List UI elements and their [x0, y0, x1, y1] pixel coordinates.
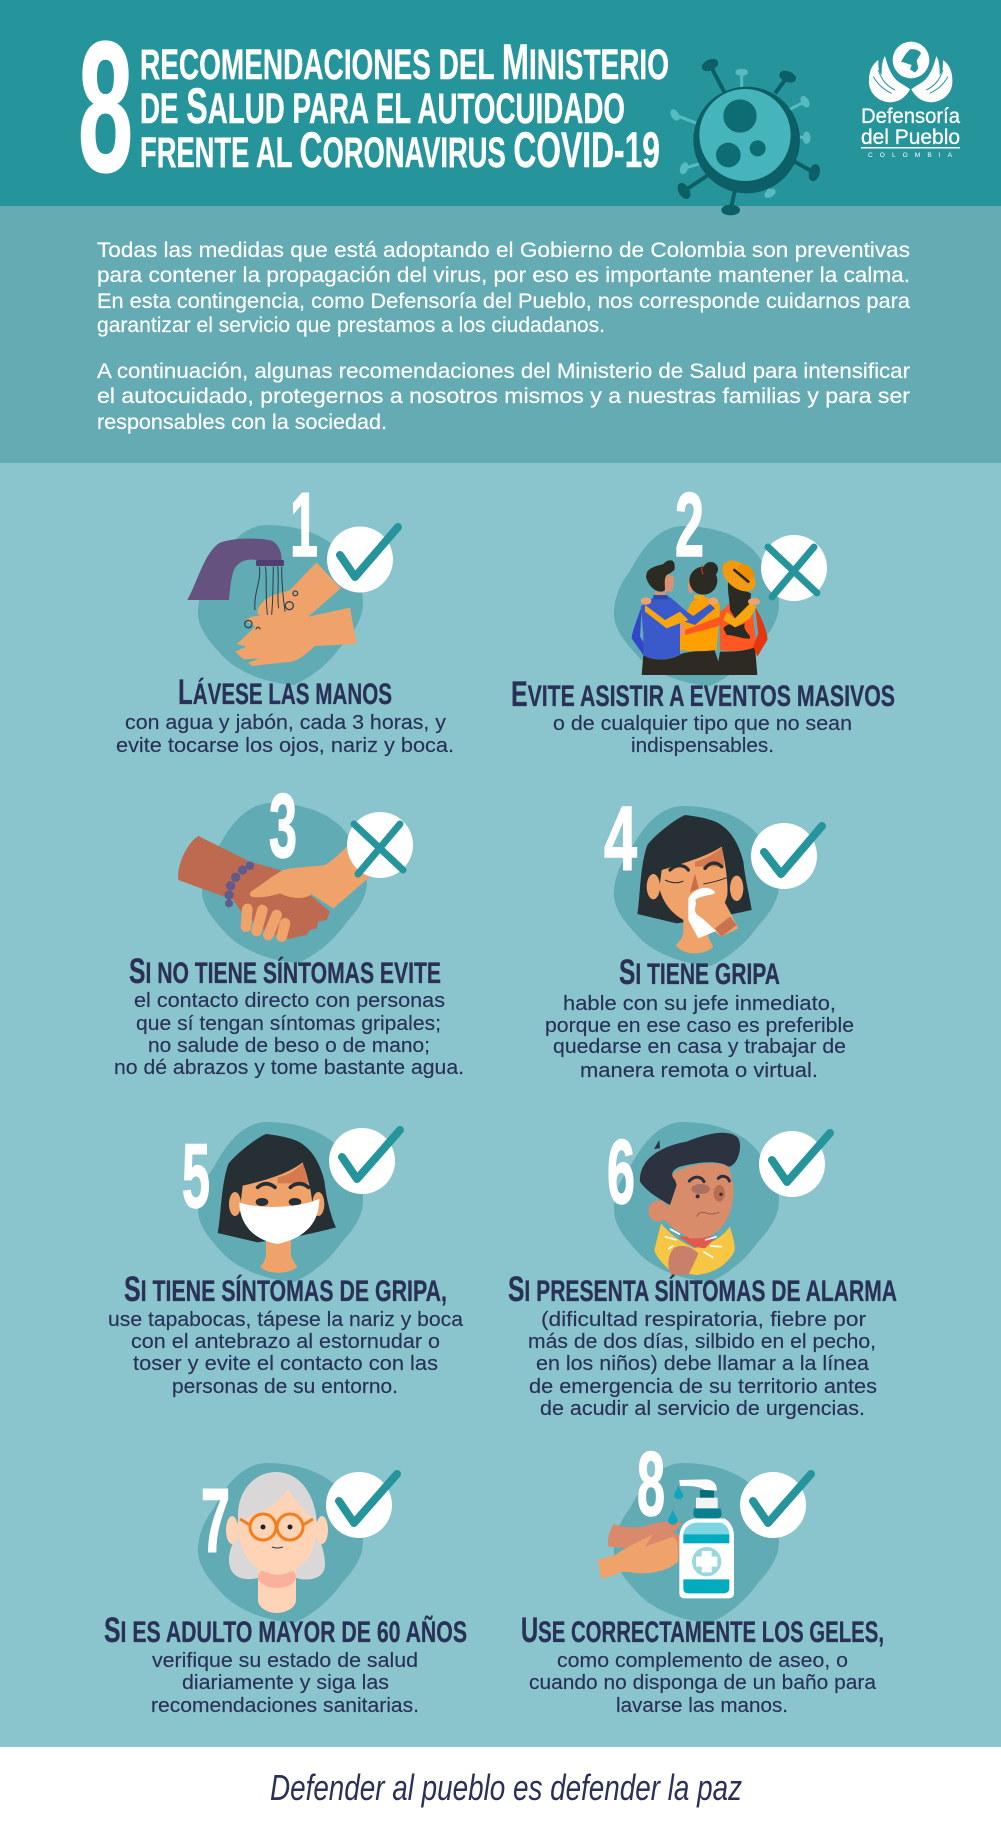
description 4: manera remota o virtual. — [580, 1059, 818, 1082]
logo: Defensoría del Pueblo — [861, 42, 960, 159]
description 5 — [108, 1308, 464, 1398]
intro paragraph 1: para contener la propagación del virus, por eso es importante mantener la calma. — [97, 263, 910, 287]
title — [140, 34, 669, 178]
illustration: handshake — [178, 836, 370, 939]
recommendation 5 — [108, 1122, 464, 1398]
description 5: con el antebrazo al estornudar o — [131, 1330, 440, 1353]
description 4: porque en ese caso es preferible — [545, 1014, 854, 1037]
blob 1 — [198, 525, 363, 685]
intro paragraph 2: el autocuidado, protegernos a nosotros mismos y a nuestras familias y para ser — [97, 384, 910, 408]
description 6: en los niños) debe llamar a la línea — [536, 1352, 870, 1375]
big number 8: 8 — [78, 4, 133, 211]
illustration: hand sanitizer — [597, 1479, 734, 1598]
check icon — [751, 823, 822, 889]
recommendation 8 — [521, 1434, 884, 1717]
main panel — [0, 463, 1001, 1747]
logo: Defensoría del Pueblo: del Pueblo — [861, 126, 960, 149]
heading 4: SI TIENE GRIPA — [619, 953, 780, 992]
illustration: woman with mask — [218, 1134, 336, 1273]
cross icon — [347, 812, 413, 878]
description 6: de acudir al servicio de urgencias. — [540, 1397, 865, 1420]
blob 6 — [614, 1122, 779, 1282]
heading 3: SI NO TIENE SÍNTOMAS EVITE — [129, 952, 441, 991]
description 4 — [545, 992, 854, 1082]
recommendation 3 — [114, 776, 464, 1079]
description 7 — [151, 1649, 419, 1717]
description 3: el contacto directo con personas — [134, 989, 445, 1012]
description 6: (dificultad respiratoria, fiebre por — [541, 1308, 866, 1331]
description 8: cuando no disponga de un baño para — [529, 1671, 877, 1694]
footer — [0, 1747, 1001, 1829]
blob 2 — [614, 526, 779, 686]
description 8: lavarse las manos. — [616, 1694, 788, 1717]
header band — [0, 0, 1001, 213]
blob 3 — [202, 803, 367, 963]
description 4: quedarse en casa y trabajar de — [553, 1035, 846, 1058]
illustration: older woman — [226, 1472, 328, 1613]
blob 7 — [198, 1463, 363, 1623]
illustration: man with sore throat — [640, 1133, 740, 1275]
blob 5 — [198, 1122, 363, 1282]
number 1: 1 — [290, 475, 318, 576]
number 6: 6 — [607, 1122, 635, 1223]
description 8 — [529, 1649, 877, 1717]
description 3: que sí tengan síntomas gripales; — [136, 1012, 441, 1035]
check icon — [326, 1472, 397, 1538]
description 1 — [116, 711, 454, 757]
description 7: verifique su estado de salud — [152, 1649, 418, 1672]
cross icon — [761, 535, 827, 601]
description 5: personas de su entorno. — [172, 1375, 398, 1398]
description 1: evite tocarse los ojos, nariz y boca. — [116, 734, 454, 757]
recommendation 4 — [545, 789, 854, 1082]
number 2: 2 — [675, 475, 704, 576]
illustration: three people — [632, 554, 767, 675]
description 5: toser y evite el contacto con las — [133, 1352, 438, 1375]
logo: Defensoría del Pueblo: COLOMBIA — [868, 152, 953, 159]
description 8: como complemento de aseo, o — [557, 1649, 848, 1672]
recommendation 6 — [508, 1122, 897, 1420]
check icon — [327, 526, 398, 592]
description 6: más de dos días, silbido en el pecho, — [528, 1330, 876, 1353]
intro paragraph 1: garantizar el servicio que prestamos a los ciudadanos. — [97, 313, 605, 337]
description 7: diariamente y siga las — [182, 1671, 389, 1694]
logo: Defensoría del Pueblo: Defensoría — [861, 105, 960, 128]
description 5: use tapabocas, tápese la nariz y boca — [108, 1308, 464, 1331]
description 3: no salude de beso o de mano; — [148, 1034, 430, 1057]
description 7: recomendaciones sanitarias. — [151, 1694, 419, 1717]
description 3 — [114, 989, 464, 1079]
intro paragraph 2: responsables con la sociedad. — [97, 410, 387, 434]
intro paragraph 1: En esta contingencia, como Defensoría del Pueblo, nos corresponde cuidarnos para — [97, 289, 910, 313]
description 4: hable con su jefe inmediato, — [563, 992, 836, 1015]
description 2 — [553, 712, 852, 757]
slogan: Defender al pueblo es defender la paz — [270, 1767, 742, 1808]
blob 8 — [614, 1463, 779, 1623]
blob 4 — [614, 806, 779, 966]
number 4: 4 — [604, 789, 637, 890]
description 1: con agua y jabón, cada 3 horas, y — [125, 711, 447, 734]
recommendation 2 — [511, 475, 895, 757]
description 6 — [528, 1308, 877, 1420]
description 2: indispensables. — [631, 734, 774, 757]
title: RECOMENDACIONES DEL MINISTERIO — [140, 34, 669, 90]
number 3: 3 — [269, 776, 297, 877]
number 7: 7 — [201, 1471, 230, 1572]
title: DE SALUD PARA EL AUTOCUIDADO — [140, 78, 625, 134]
heading 1: LÁVESE LAS MANOS — [178, 673, 392, 712]
description 6: de emergencia de su territorio antes — [529, 1375, 877, 1398]
intro paragraph 1 — [97, 238, 910, 337]
check icon — [329, 1128, 400, 1194]
recommendation 1 — [116, 475, 454, 757]
check icon — [759, 1131, 830, 1197]
intro band — [0, 206, 1001, 463]
illustration: washing hands — [187, 539, 357, 666]
intro paragraph 2 — [97, 359, 910, 434]
number 8: 8 — [637, 1434, 665, 1535]
icon: virus — [671, 59, 819, 213]
recommendation 7 — [104, 1463, 467, 1717]
illustration: woman coughing — [637, 815, 752, 953]
intro paragraph 2: A continuación, algunas recomendaciones del Ministerio de Salud para intensificar — [97, 359, 910, 383]
heading 5: SI TIENE SÍNTOMAS DE GRIPA, — [124, 1270, 447, 1309]
description 2: o de cualquier tipo que no sean — [553, 712, 852, 735]
description 3: no dé abrazos y tome bastante agua. — [114, 1056, 464, 1079]
number 5: 5 — [182, 1126, 210, 1227]
heading 7: SI ES ADULTO MAYOR DE 60 AÑOS — [104, 1611, 467, 1650]
intro paragraph 1: Todas las medidas que está adoptando el Gobierno de Colombia son preventivas — [97, 238, 910, 262]
check icon — [740, 1472, 811, 1538]
title: FRENTE AL CORONAVIRUS COVID-19 — [140, 122, 660, 178]
